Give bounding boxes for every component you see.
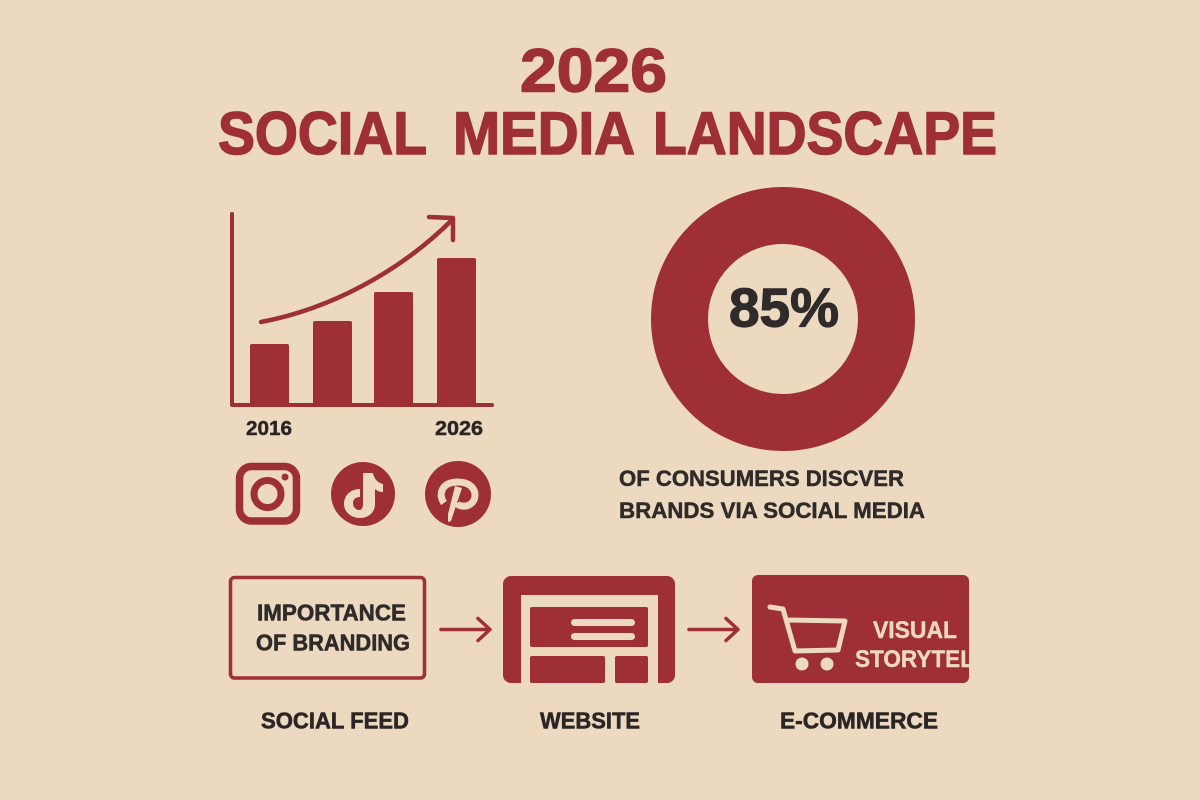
chart bars [250,258,476,406]
title: LANDSCAPE [653,100,997,167]
title [218,36,997,167]
bar chart: growth 2016 to 2026 [232,214,492,440]
bottom labels: SOCIAL FEED [261,708,409,734]
panel text: OF BRANDING [256,630,410,656]
panel: e-commerce visual storytelling [752,575,974,683]
bottom labels [261,708,938,734]
icon: website layout [503,576,675,683]
title: 2026 [520,36,667,104]
title: MEDIA [453,100,635,167]
icon: pinterest [425,461,491,527]
panel text [256,600,410,656]
donut value: 85% [729,276,839,338]
chart axes [232,214,492,405]
panel: importance of branding [230,578,424,678]
icon: instagram [240,466,296,521]
year labels [246,417,483,440]
panel text: STORYTEL [855,646,974,673]
icon: tiktok [331,462,395,526]
bottom labels: WEBSITE [540,708,640,734]
caption: consumers statistic [619,466,925,523]
year labels: 2016 [246,417,292,440]
icon: shopping cart [770,607,845,670]
infographic canvas [218,48,996,729]
panel text: VISUAL [873,617,957,644]
growth arrow [261,217,453,322]
title: SOCIAL [218,100,427,167]
panel text: IMPORTANCE [257,600,406,626]
bottom labels: E-COMMERCE [780,708,938,734]
year labels: 2026 [435,417,483,440]
arrow: website to e-commerce [689,618,738,640]
arrow: branding to website [441,618,490,640]
caption: consumers statistic: BRANDS VIA SOCIAL MEDIA [619,498,925,523]
panel text [856,621,969,668]
donut chart: 85% [680,216,886,422]
caption: consumers statistic: OF CONSUMERS DISCVER [619,466,904,491]
